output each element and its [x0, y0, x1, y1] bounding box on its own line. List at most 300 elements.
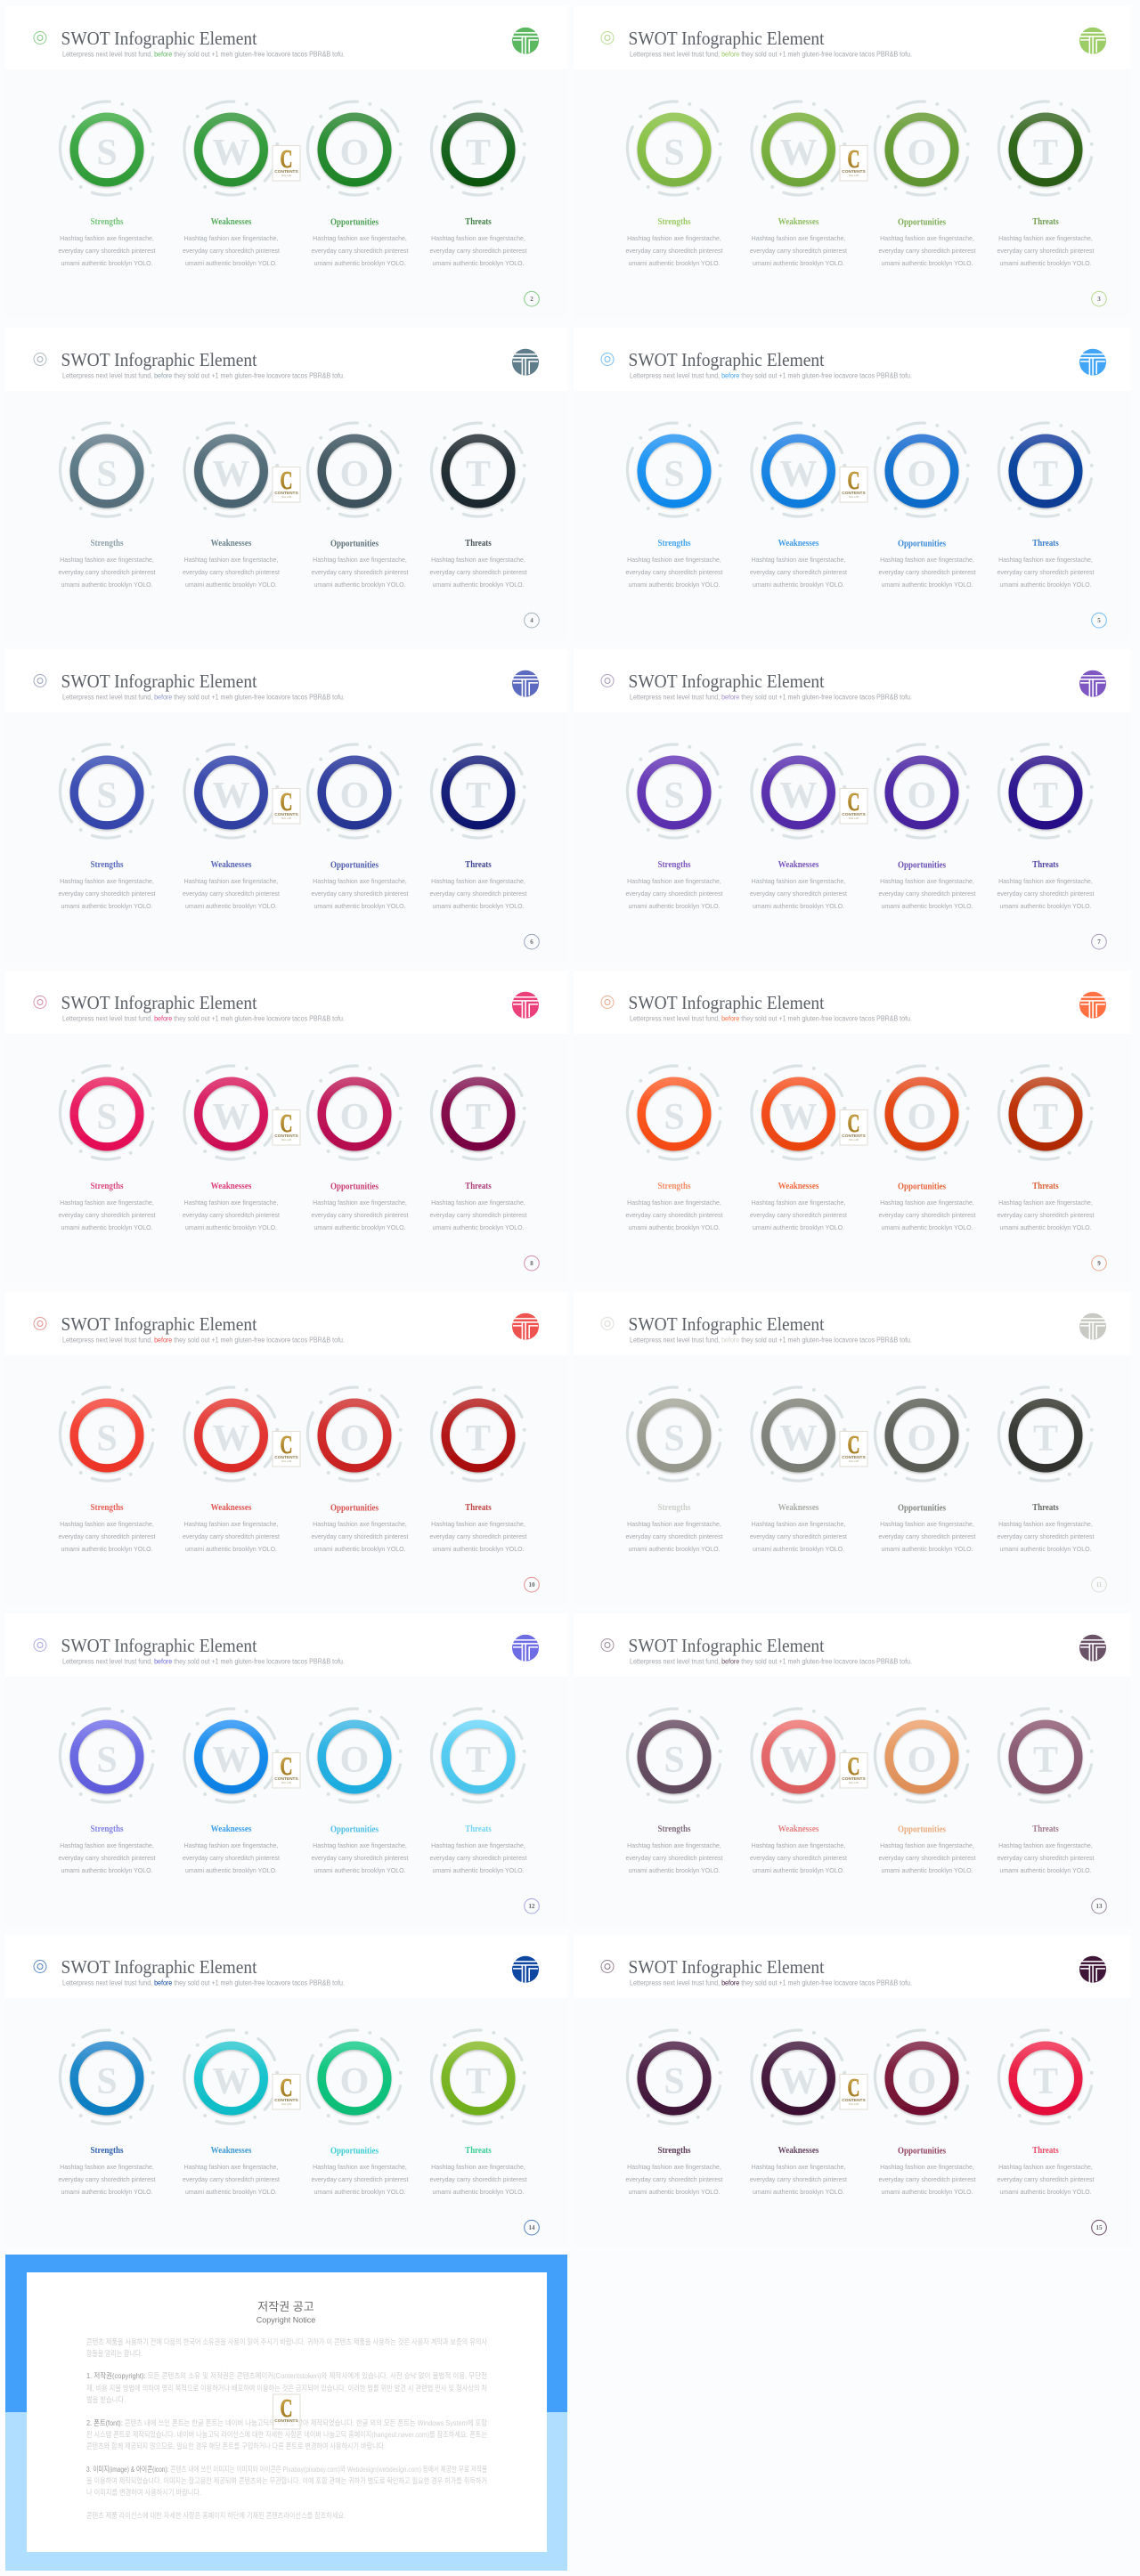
item: Weaknesses: Weaknesses	[211, 859, 252, 870]
item: Threats: umami authentic brooklyn YOLO.	[433, 1223, 524, 1231]
item: Weaknesses: Hashtag fashion axe fingerstache,	[184, 1199, 278, 1207]
item: Threats	[998, 1709, 1094, 1874]
item: Weaknesses: W	[212, 776, 249, 817]
item: Threats: Threats	[465, 859, 492, 870]
watermark badge: CONTENTS	[274, 812, 298, 817]
item: Strengths	[625, 2030, 723, 2196]
item: Strengths	[59, 2030, 155, 2196]
item: Opportunities: umami authentic brooklyn YOLO.	[314, 1223, 406, 1231]
icon: logo	[1079, 1956, 1106, 1983]
item: Threats: Hashtag fashion axe fingerstache,	[998, 1841, 1093, 1849]
item: Strengths: Hashtag fashion axe fingerstache,	[627, 1199, 721, 1207]
item: Strengths: everyday carry shoreditch pinterest	[59, 2175, 155, 2183]
title: SWOT Infographic Element	[629, 349, 825, 370]
item: Opportunities: Opportunities	[330, 2146, 379, 2157]
item: Opportunities: Hashtag fashion axe fingerstache,	[880, 2163, 974, 2171]
item: Strengths: Hashtag fashion axe fingerstache,	[60, 1199, 154, 1207]
item: Threats: umami authentic brooklyn YOLO.	[433, 1545, 524, 1553]
item: Opportunities: Hashtag fashion axe fingerstache,	[880, 877, 974, 885]
item: Strengths: Strengths	[91, 2145, 124, 2156]
item: Opportunities: O	[908, 2061, 936, 2102]
item: Threats	[429, 2030, 527, 2196]
item: Strengths	[59, 1066, 155, 1231]
subtitle: Letterpress next level trust fund, before they sold out +1 meh gluten-free locavore tacos PBR&B tofu.	[630, 372, 912, 379]
item: Strengths: umami authentic brooklyn YOLO.	[629, 1223, 720, 1231]
item: Threats: Threats	[465, 1824, 492, 1834]
item: Strengths: S	[664, 133, 685, 174]
item: Threats	[429, 744, 527, 910]
item: Strengths	[59, 102, 155, 267]
item: Weaknesses: Weaknesses	[778, 538, 819, 549]
item: Opportunities: Hashtag fashion axe fingerstache,	[313, 2163, 407, 2171]
icon: target	[601, 1638, 614, 1651]
item: Opportunities: umami authentic brooklyn YOLO.	[314, 581, 406, 589]
item: Strengths: umami authentic brooklyn YOLO.	[61, 1545, 153, 1553]
icon: target	[601, 1318, 614, 1330]
icon: logo	[512, 1313, 539, 1340]
copyright body text: 항들을 알리는 합니다.	[86, 2349, 142, 2358]
panel: slide 5 blue	[574, 328, 1131, 640]
item: Threats: everyday carry shoreditch pinterest	[429, 1854, 527, 1862]
page number	[525, 291, 539, 306]
item: Threats	[998, 1387, 1094, 1553]
watermark badge: CONTENTS	[842, 1455, 866, 1460]
item: Weaknesses: everyday carry shoreditch pinterest	[750, 1532, 847, 1540]
copyright body text: 콘텐츠 제품 라이선스에 대한 자세한 사항은 홈페이지 하단에 기재된 콘텐츠라이선스를 참조하세요.	[86, 2510, 346, 2520]
item: Opportunities: Opportunities	[898, 1503, 947, 1514]
item: Strengths	[625, 1709, 723, 1874]
watermark badge: C	[848, 788, 860, 817]
title: SWOT Infographic Element	[629, 670, 825, 692]
item: Strengths: Strengths	[91, 216, 124, 227]
item: Threats: umami authentic brooklyn YOLO.	[999, 1866, 1092, 1874]
item: Weaknesses	[183, 744, 280, 910]
item: Strengths	[625, 102, 723, 267]
item: Threats: everyday carry shoreditch pinterest	[998, 1854, 1094, 1862]
copyright body text: 1. 저작권(copyright): 모든 콘텐츠의 소유 및 저작권은 콘텐츠메이커(Contentstoken)와 제작사에게 있습니다. 사전 승낙 없이 불법적 이용, 무단전	[86, 2370, 487, 2380]
item: Strengths: everyday carry shoreditch pinterest	[625, 1854, 723, 1862]
watermark badge: CONTENTS	[274, 491, 298, 496]
item: Threats	[998, 1066, 1094, 1231]
title: SWOT Infographic Element	[61, 1956, 257, 1978]
item: Strengths: S	[96, 2061, 118, 2102]
icon: target	[34, 675, 46, 687]
item: Weaknesses: W	[780, 133, 818, 174]
item: Weaknesses: W	[212, 454, 249, 495]
subtitle: Letterpress next level trust fund, before they sold out +1 meh gluten-free locavore tacos PBR&B tofu.	[630, 1979, 912, 1987]
copyright heading: 저작권 공고	[257, 2300, 314, 2313]
subtitle: Letterpress next level trust fund, before they sold out +1 meh gluten-free locavore tacos PBR&B tofu.	[62, 693, 345, 702]
watermark badge: C	[280, 467, 292, 495]
panel: slide 8 pink	[5, 971, 568, 1283]
item: Opportunities: umami authentic brooklyn YOLO.	[882, 902, 973, 910]
page number	[1092, 934, 1106, 949]
item: Strengths: Strengths	[657, 216, 691, 227]
item: Opportunities: Hashtag fashion axe fingerstache,	[880, 556, 974, 564]
item: Weaknesses: Hashtag fashion axe fingerstache,	[184, 1841, 278, 1849]
panel: slide 6 indigo	[5, 649, 568, 962]
item: Threats: everyday carry shoreditch pinterest	[429, 247, 527, 255]
page number: 13	[1095, 1903, 1103, 1910]
item: Opportunities: Hashtag fashion axe fingerstache,	[880, 1520, 974, 1528]
item: Weaknesses: Weaknesses	[778, 1824, 819, 1834]
page number: 11	[1096, 1581, 1103, 1589]
item: Threats: Threats	[1032, 216, 1059, 227]
item: Strengths: everyday carry shoreditch pinterest	[59, 1854, 155, 1862]
item: Weaknesses: Weaknesses	[211, 2145, 252, 2156]
icon: target	[34, 1961, 46, 1973]
watermark badge	[840, 788, 867, 824]
item: Strengths: umami authentic brooklyn YOLO.	[629, 1866, 720, 1874]
watermark badge: MAL LAB	[849, 1781, 859, 1784]
panel: slide 2 green	[5, 6, 568, 319]
icon: logo	[1079, 1313, 1106, 1340]
item: Opportunities: O	[908, 1740, 936, 1781]
item: Threats: Threats	[1032, 1502, 1059, 1513]
item: Strengths: umami authentic brooklyn YOLO.	[61, 1866, 153, 1874]
item: Threats: Hashtag fashion axe fingerstache,	[998, 1199, 1093, 1207]
item: Weaknesses: umami authentic brooklyn YOLO.	[753, 1223, 844, 1231]
item: Threats: umami authentic brooklyn YOLO.	[433, 581, 524, 589]
item: Opportunities: everyday carry shoreditch pinterest	[312, 247, 408, 255]
item: Strengths	[625, 1066, 723, 1231]
icon: logo	[512, 349, 539, 376]
item: Strengths: S	[96, 1097, 118, 1138]
watermark badge	[273, 2394, 300, 2429]
item: Strengths: Hashtag fashion axe fingerstache,	[627, 2163, 721, 2171]
item: Opportunities	[307, 744, 408, 910]
icon: target	[601, 32, 614, 45]
watermark badge: CONTENTS	[842, 812, 866, 817]
item: Opportunities: umami authentic brooklyn YOLO.	[882, 1866, 973, 1874]
watermark badge: MAL LAB	[281, 2102, 291, 2106]
item: Strengths: everyday carry shoreditch pinterest	[625, 247, 723, 255]
item: Threats	[998, 102, 1094, 267]
watermark badge: MAL LAB	[281, 1781, 291, 1784]
item: Threats: Threats	[465, 1502, 492, 1513]
copyright body text: 나 이미지를 변경하여 사용하시기 바랍니다.	[86, 2487, 201, 2497]
item: Threats: T	[1033, 2061, 1058, 2102]
item: Threats: T	[466, 1097, 491, 1138]
item: Threats: T	[466, 133, 491, 174]
title: SWOT Infographic Element	[61, 28, 257, 49]
item: Strengths: everyday carry shoreditch pinterest	[59, 247, 155, 255]
item: Threats: Threats	[465, 2145, 492, 2156]
item: Opportunities: umami authentic brooklyn YOLO.	[314, 902, 406, 910]
item: Threats: everyday carry shoreditch pinterest	[998, 890, 1094, 898]
item: Weaknesses	[183, 2030, 280, 2196]
item: Strengths	[625, 1387, 723, 1553]
page number: 4	[530, 617, 533, 624]
item: Strengths: Strengths	[657, 538, 691, 549]
item: Strengths: umami authentic brooklyn YOLO.	[629, 581, 720, 589]
page number: 12	[529, 1903, 535, 1910]
item: Opportunities	[875, 744, 976, 910]
item: Strengths: umami authentic brooklyn YOLO.	[61, 902, 153, 910]
item: Threats: T	[1033, 1740, 1058, 1781]
item: Strengths: everyday carry shoreditch pinterest	[625, 890, 723, 898]
item: Opportunities: Hashtag fashion axe fingerstache,	[880, 1841, 974, 1849]
page number: 3	[1097, 296, 1101, 303]
page number	[525, 1577, 539, 1592]
item: Opportunities: everyday carry shoreditch pinterest	[878, 568, 976, 576]
item: Weaknesses	[183, 423, 280, 589]
item: Weaknesses	[183, 1709, 280, 1874]
panel: slide 7 purple	[574, 649, 1131, 962]
item: Opportunities	[875, 2030, 976, 2196]
page number: 6	[530, 939, 533, 946]
item: Weaknesses	[750, 1066, 847, 1231]
item: Threats: umami authentic brooklyn YOLO.	[999, 902, 1092, 910]
item: Opportunities	[307, 1709, 408, 1874]
item: Weaknesses: Hashtag fashion axe fingerstache,	[752, 1841, 845, 1849]
item: Threats: T	[466, 2061, 491, 2102]
subtitle: Letterpress next level trust fund, before they sold out +1 meh gluten-free locavore tacos PBR&B tofu.	[62, 1336, 345, 1345]
page number: 14	[529, 2224, 535, 2231]
watermark badge: CONTENTS	[842, 2098, 866, 2103]
item: Weaknesses: umami authentic brooklyn YOLO.	[753, 2188, 844, 2196]
item: Weaknesses: W	[780, 1740, 818, 1781]
item: Strengths	[59, 423, 155, 589]
item: Strengths: Hashtag fashion axe fingerstache,	[60, 234, 154, 242]
item: Weaknesses: Hashtag fashion axe fingerstache,	[184, 1520, 278, 1528]
panel: slide 3 lime	[574, 6, 1131, 319]
item: Weaknesses: Hashtag fashion axe fingerstache,	[184, 556, 278, 564]
item: Threats: everyday carry shoreditch pinterest	[998, 568, 1094, 576]
item: Opportunities: Hashtag fashion axe fingerstache,	[313, 234, 407, 242]
item: Strengths: S	[664, 1418, 685, 1459]
item: Weaknesses	[183, 1066, 280, 1231]
page number: 15	[1095, 2224, 1103, 2231]
item: Strengths: S	[664, 454, 685, 495]
item: Weaknesses: W	[212, 1418, 249, 1459]
item: Weaknesses: everyday carry shoreditch pinterest	[183, 568, 280, 576]
icon: target	[34, 1318, 46, 1330]
item: Threats	[429, 1066, 527, 1231]
item: Opportunities: Opportunities	[330, 1503, 379, 1514]
watermark badge: MAL LAB	[849, 1138, 859, 1142]
item: Opportunities: Opportunities	[898, 2146, 947, 2157]
item: Weaknesses: W	[780, 1418, 818, 1459]
panel: slide 14 teal multicolor	[5, 1935, 568, 2247]
item: Strengths: Strengths	[91, 1502, 124, 1513]
page number	[525, 613, 539, 628]
item: Threats: Hashtag fashion axe fingerstache,	[431, 1841, 525, 1849]
item: Opportunities: O	[340, 1418, 369, 1459]
item: Weaknesses: umami authentic brooklyn YOLO.	[753, 581, 844, 589]
title: SWOT Infographic Element	[61, 670, 257, 692]
icon: target	[34, 353, 46, 365]
item: Strengths: everyday carry shoreditch pinterest	[59, 1532, 155, 1540]
item: Weaknesses: everyday carry shoreditch pinterest	[750, 2175, 847, 2183]
title: SWOT Infographic Element	[629, 1956, 825, 1978]
item: Threats: everyday carry shoreditch pinterest	[429, 568, 527, 576]
subtitle: Letterpress next level trust fund, before they sold out +1 meh gluten-free locavore tacos PBR&B tofu.	[630, 50, 912, 59]
item: Weaknesses: umami authentic brooklyn YOLO.	[185, 259, 277, 267]
watermark badge: CONTENTS	[274, 1455, 298, 1460]
item: Opportunities: Hashtag fashion axe fingerstache,	[880, 1199, 974, 1207]
item: Threats: everyday carry shoreditch pinterest	[429, 890, 527, 898]
item: Opportunities: O	[908, 133, 936, 174]
item: Opportunities: O	[340, 133, 369, 174]
icon: target	[601, 675, 614, 687]
item: Opportunities: everyday carry shoreditch pinterest	[312, 2175, 408, 2183]
watermark badge: MAL LAB	[849, 495, 859, 499]
item: Strengths: S	[664, 1740, 685, 1781]
item: Weaknesses: Hashtag fashion axe fingerstache,	[752, 556, 845, 564]
item: Weaknesses: W	[212, 1097, 249, 1138]
watermark badge: C	[848, 2074, 860, 2102]
item: Threats: Hashtag fashion axe fingerstache,	[998, 2163, 1093, 2171]
copyright body text	[86, 2336, 487, 2520]
panel: slide 9 orange	[574, 971, 1131, 1283]
item: Threats: T	[466, 1740, 491, 1781]
item: Weaknesses: umami authentic brooklyn YOLO.	[753, 1545, 844, 1553]
subtitle: Letterpress next level trust fund, before they sold out +1 meh gluten-free locavore tacos PBR&B tofu.	[630, 1015, 912, 1022]
page number: 10	[529, 1581, 535, 1589]
item: Opportunities: O	[908, 1418, 936, 1459]
item: Opportunities: Opportunities	[898, 217, 947, 228]
item: Threats: everyday carry shoreditch pinterest	[998, 1532, 1094, 1540]
title: SWOT Infographic Element	[61, 1313, 257, 1335]
item: Weaknesses: umami authentic brooklyn YOLO.	[185, 1545, 277, 1553]
item: Opportunities: Hashtag fashion axe fingerstache,	[880, 234, 974, 242]
watermark badge: CONTENTS	[274, 169, 298, 175]
watermark badge	[273, 1109, 300, 1145]
item: Opportunities: umami authentic brooklyn YOLO.	[314, 1545, 406, 1553]
item: Threats: T	[1033, 1418, 1058, 1459]
item: Weaknesses: Hashtag fashion axe fingerstache,	[752, 877, 845, 885]
watermark badge: CONTENTS	[274, 2098, 298, 2103]
item: Opportunities: O	[340, 1740, 369, 1781]
item: Weaknesses: Weaknesses	[211, 538, 252, 549]
item: Strengths: S	[96, 133, 118, 174]
watermark badge: MAL LAB	[281, 1459, 291, 1463]
item: Opportunities: O	[340, 776, 369, 817]
item: Strengths: umami authentic brooklyn YOLO.	[61, 1223, 153, 1231]
watermark badge: C	[848, 1431, 860, 1459]
page number	[525, 934, 539, 949]
panel: slide 4 blue grey	[5, 328, 568, 640]
item: Strengths: everyday carry shoreditch pinterest	[625, 1532, 723, 1540]
item: Strengths: everyday carry shoreditch pinterest	[59, 890, 155, 898]
item: Opportunities: umami authentic brooklyn YOLO.	[882, 1545, 973, 1553]
watermark badge: C	[280, 1109, 292, 1138]
item: Weaknesses: everyday carry shoreditch pinterest	[183, 890, 280, 898]
item: Threats: Hashtag fashion axe fingerstache,	[431, 556, 525, 564]
item: Strengths: Hashtag fashion axe fingerstache,	[627, 556, 721, 564]
item: Threats: Hashtag fashion axe fingerstache,	[431, 2163, 525, 2171]
item: Opportunities: umami authentic brooklyn YOLO.	[882, 1223, 973, 1231]
item: Opportunities: Hashtag fashion axe fingerstache,	[313, 1841, 407, 1849]
item: Strengths: Hashtag fashion axe fingerstache,	[627, 1841, 721, 1849]
item: Opportunities: Opportunities	[330, 538, 379, 549]
item: Threats: Threats	[465, 538, 492, 549]
item: Weaknesses: Hashtag fashion axe fingerstache,	[752, 1199, 845, 1207]
item: Weaknesses: umami authentic brooklyn YOLO.	[185, 1866, 277, 1874]
item: Strengths: S	[96, 454, 118, 495]
item: Opportunities: everyday carry shoreditch pinterest	[878, 1532, 976, 1540]
page number: 7	[1097, 939, 1101, 946]
page number	[1092, 1898, 1106, 1914]
watermark badge	[273, 2074, 300, 2109]
item: Strengths: everyday carry shoreditch pinterest	[625, 2175, 723, 2183]
item: Threats: everyday carry shoreditch pinterest	[998, 2175, 1094, 2183]
item: Weaknesses: Hashtag fashion axe fingerstache,	[184, 2163, 278, 2171]
item: Threats: Hashtag fashion axe fingerstache,	[431, 234, 525, 242]
watermark badge: CONTENTS	[274, 1134, 298, 1139]
item: Weaknesses: umami authentic brooklyn YOLO.	[185, 2188, 277, 2196]
panel: slide 13 warm multicolor	[574, 1613, 1131, 1926]
item: Weaknesses: W	[780, 2061, 818, 2102]
watermark badge: MAL LAB	[281, 1138, 291, 1142]
item: Threats: Hashtag fashion axe fingerstache,	[431, 1199, 525, 1207]
item: Threats	[429, 423, 527, 589]
item: Opportunities: everyday carry shoreditch pinterest	[878, 890, 976, 898]
item: Threats: umami authentic brooklyn YOLO.	[999, 259, 1092, 267]
copyright body text: 된 시스템 폰트로 제작되었습니다. 네이버 나눔고딕 라이선스에 대한 자세한 사항은 네이버 나눔고딕 홈페이지(hangeul.naver.com)를 참조하세요. 폰트는	[86, 2429, 487, 2439]
page number: 9	[1097, 1260, 1101, 1267]
item: Threats: T	[1033, 454, 1058, 495]
icon: logo	[512, 1635, 539, 1662]
item: Opportunities	[307, 1066, 408, 1231]
item: Opportunities	[875, 1387, 976, 1553]
item: Opportunities: umami authentic brooklyn YOLO.	[314, 259, 406, 267]
item: Weaknesses: umami authentic brooklyn YOLO.	[185, 902, 277, 910]
item: Weaknesses	[183, 102, 280, 267]
item: Opportunities: everyday carry shoreditch pinterest	[878, 1854, 976, 1862]
item: Weaknesses: Weaknesses	[211, 1502, 252, 1513]
item: Threats: Threats	[465, 1181, 492, 1191]
item: Opportunities	[307, 2030, 408, 2196]
item: Weaknesses: umami authentic brooklyn YOLO.	[753, 902, 844, 910]
item: Threats	[998, 423, 1094, 589]
item: Weaknesses	[750, 1387, 847, 1553]
watermark badge: MAL LAB	[281, 495, 291, 499]
item: Threats: umami authentic brooklyn YOLO.	[999, 1545, 1092, 1553]
item: Strengths: Strengths	[657, 1502, 691, 1513]
item: Opportunities: everyday carry shoreditch pinterest	[878, 1211, 976, 1219]
watermark badge	[273, 1752, 300, 1788]
title: SWOT Infographic Element	[629, 1313, 825, 1335]
item: Weaknesses: everyday carry shoreditch pinterest	[750, 568, 847, 576]
item: Opportunities: umami authentic brooklyn YOLO.	[882, 581, 973, 589]
item: Threats: everyday carry shoreditch pinterest	[429, 2175, 527, 2183]
item: Opportunities: Hashtag fashion axe fingerstache,	[313, 556, 407, 564]
item: Strengths: Strengths	[657, 859, 691, 870]
item: Threats: everyday carry shoreditch pinterest	[429, 1211, 527, 1219]
item: Strengths: umami authentic brooklyn YOLO.	[629, 259, 720, 267]
watermark badge: MAL LAB	[281, 174, 291, 177]
page number	[525, 2220, 539, 2235]
watermark badge: C	[280, 145, 292, 174]
watermark badge: CONTENTS	[274, 1776, 298, 1782]
icon: target	[34, 1638, 46, 1651]
icon: target	[34, 32, 46, 45]
page number: 5	[1097, 617, 1101, 624]
item: Weaknesses: Weaknesses	[778, 859, 819, 870]
icon: target	[601, 1961, 614, 1973]
watermark badge: C	[848, 467, 860, 495]
item: Opportunities: Hashtag fashion axe fingerstache,	[313, 1520, 407, 1528]
item: Strengths: Strengths	[657, 1181, 691, 1191]
item: Opportunities: everyday carry shoreditch pinterest	[312, 1854, 408, 1862]
page number	[1092, 291, 1106, 306]
page number	[1092, 1255, 1106, 1271]
item: Strengths	[59, 1709, 155, 1874]
item: Weaknesses	[183, 1387, 280, 1553]
subtitle: Letterpress next level trust fund, before they sold out +1 meh gluten-free locavore tacos PBR&B tofu.	[62, 1658, 345, 1665]
